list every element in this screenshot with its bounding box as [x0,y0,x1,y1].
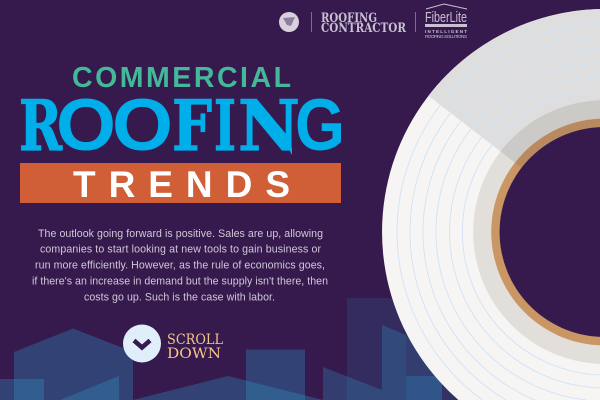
intro paragraph: if there's an increase in demand but the supply isn't there, then [32,276,328,288]
scroll down label: DOWN [167,346,221,362]
scroll down label [167,332,223,362]
intro paragraph: costs go up. Such is the case with labor. [84,291,275,303]
intro paragraph [32,228,328,303]
title: Roofing: I [214,86,236,167]
roll of roofing membrane [382,9,600,400]
title: Roofing: G [295,85,345,166]
title: Roofing [19,85,345,167]
logo: Roofing Contractor: CONTRACTOR [321,21,406,36]
logo: FiberLite: ROOFING SOLUTIONS [425,34,467,39]
logo: badge icon [279,12,299,32]
title: Roofing: F [172,86,212,167]
intro paragraph: run more efficiently. However, as the rule of economics goes, [35,260,325,272]
scroll down label: SCROLL [167,332,223,348]
title banner: Trends [20,163,341,205]
logo: FiberLite: FiberLite [425,9,467,26]
title: Roofing: N [238,86,300,167]
logo: Roofing Contractor: ROOFING [321,11,377,26]
intro paragraph: companies to start looking at new tools to gain business or [40,244,321,256]
title banner: Trends: TRENDS [73,164,290,205]
skyline buildings [0,298,482,400]
logo: Roofing Contractor [311,11,406,36]
scroll down button [123,324,161,362]
logo: FiberLite [415,4,467,39]
intro paragraph: The outlook going forward is positive. Sales are up, allowing [38,228,323,240]
title: Roofing: O [112,85,173,166]
title: Commercial: COMMERCIAL [72,62,291,94]
title: Roofing: R [19,86,62,167]
title: Roofing: O [56,85,116,166]
logo: FiberLite: INTELLIGENT [425,29,467,34]
